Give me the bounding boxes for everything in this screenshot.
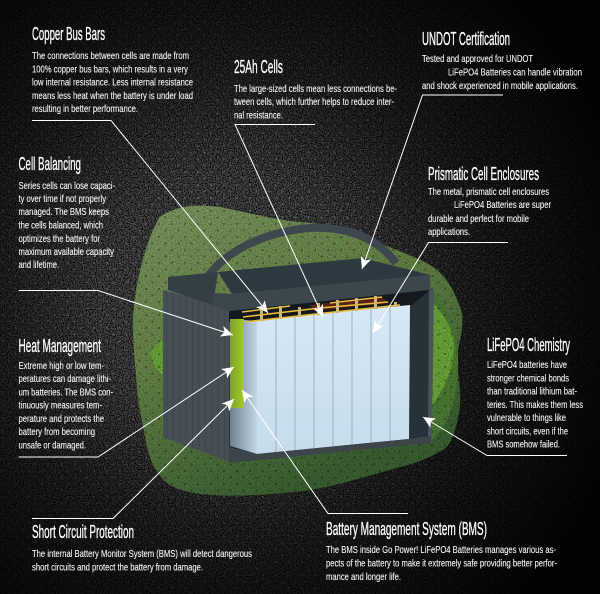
battery floor rim bbox=[229, 436, 431, 463]
callout: Short Circuit Protection: short circuits and protect the battery from damage. bbox=[32, 562, 203, 574]
callout: 25Ah Cells bbox=[234, 56, 397, 317]
callout: Cell Balancing: the cells balanced, which bbox=[18, 220, 103, 232]
lid top face bbox=[218, 258, 430, 294]
callout: Short Circuit Protection bbox=[32, 399, 252, 574]
callout: Copper Bus Bars: The connections between cells are made from bbox=[32, 51, 189, 62]
cell seams bbox=[276, 307, 390, 452]
callout: Prismatic Cell Enclosures: The metal, prismatic cell enclosures bbox=[428, 187, 549, 198]
callout: UNDOT Certification bbox=[362, 28, 582, 269]
callout: 25Ah Cells: nal resistance. bbox=[234, 110, 283, 122]
left side panel with ribs bbox=[163, 290, 230, 462]
callout: 25Ah Cells: 25Ah Cells bbox=[234, 56, 283, 77]
callout: Prismatic Cell Enclosures: LiFePO4 Batteries are super bbox=[454, 200, 551, 211]
bright green patch right bbox=[432, 302, 454, 405]
callout: LiFePO4 Chemistry bbox=[423, 334, 583, 456]
callout: 25Ah Cells: The large-sized cells mean less connections be- bbox=[234, 84, 397, 95]
callout: Copper Bus Bars: resulting in better performance. bbox=[32, 104, 138, 115]
callout: LiFePO4 Chemistry: vulnerable to things like bbox=[487, 413, 566, 424]
callout: Copper Bus Bars bbox=[32, 23, 268, 313]
green grain bbox=[130, 200, 466, 500]
green BMS board bbox=[230, 319, 244, 408]
callout: Short Circuit Protection: Short Circuit Protection bbox=[32, 521, 134, 542]
callout: UNDOT Certification: Tested and approved for UNDOT bbox=[422, 54, 533, 65]
lid rear left bbox=[168, 272, 218, 305]
callout: Short Circuit Protection: The internal Battery Monitor System (BMS) will detect dangerous bbox=[32, 549, 252, 560]
callout: Copper Bus Bars: low internal resistance. Less internal resistance bbox=[32, 78, 193, 88]
callout: UNDOT Certification: UNDOT Certification bbox=[422, 28, 510, 49]
callout: LiFePO4 Chemistry: BMS somehow failed. bbox=[487, 440, 560, 450]
callout: Heat Management: um batteries. The BMS con- bbox=[18, 388, 113, 398]
cell end face bbox=[230, 320, 257, 454]
bright green patch left bbox=[150, 340, 164, 376]
right wall bbox=[408, 289, 433, 439]
callout: Battery Management System: mance and longer life. bbox=[326, 572, 401, 583]
interior back wall bbox=[228, 289, 433, 460]
callout: Battery Management System bbox=[242, 390, 557, 583]
callout: Cell Balancing bbox=[18, 153, 233, 335]
callout: Heat Management: unsafe or damaged. bbox=[18, 440, 86, 452]
callout: Prismatic Cell Enclosures: durable and perfect for mobile bbox=[428, 214, 529, 225]
green mid-tone right bbox=[425, 285, 458, 445]
callout: LiFePO4 Chemistry: LiFePO4 batteries have bbox=[487, 360, 567, 371]
callout: Heat Management bbox=[18, 335, 234, 457]
callout: Cell Balancing: optimizes the battery for bbox=[18, 234, 100, 245]
battery illustration bbox=[163, 228, 434, 463]
callout: Cell Balancing: Series cells can lose capaci- bbox=[18, 181, 115, 192]
callout: Heat Management: perature and protects the bbox=[18, 414, 104, 425]
copper bus bars bbox=[242, 296, 400, 322]
callout: Cell Balancing: managed. The BMS keeps bbox=[18, 207, 109, 218]
cell fronts bbox=[257, 305, 410, 454]
callout: Copper Bus Bars: Copper Bus Bars bbox=[32, 23, 105, 44]
lid front face bbox=[213, 275, 430, 311]
callout: Cell Balancing: and lifetime. bbox=[18, 260, 59, 271]
green blob behind the battery bbox=[130, 200, 466, 500]
bus bar gap bbox=[229, 290, 430, 322]
callout: Copper Bus Bars: 100% copper bus bars, which results in a very bbox=[32, 64, 189, 76]
callout: Prismatic Cell Enclosures: applications. bbox=[428, 227, 470, 238]
callout: Heat Management: battery from becoming bbox=[18, 427, 95, 438]
callout: Cell Balancing: Cell Balancing bbox=[18, 153, 81, 174]
callout: LiFePO4 Chemistry: stronger chemical bonds bbox=[487, 374, 569, 384]
callout: LiFePO4 Chemistry: short circuits, even if the bbox=[487, 426, 568, 438]
callout: Heat Management: Heat Management bbox=[18, 335, 101, 356]
callout: Heat Management: peratures can damage lithi- bbox=[18, 374, 111, 385]
callout: Prismatic Cell Enclosures bbox=[373, 163, 551, 333]
callout: Heat Management: tinuously measures tem- bbox=[18, 400, 102, 412]
callout: 25Ah Cells: tween cells, which further helps to reduce inter- bbox=[234, 97, 394, 108]
callout: Heat Management: Extreme high or low tem- bbox=[18, 361, 104, 372]
callout: Cell Balancing: ty over time if not properly bbox=[18, 194, 107, 205]
callout: Copper Bus Bars: means less heat when the battery is under load bbox=[32, 91, 193, 102]
callout: Cell Balancing: maximum available capacity bbox=[18, 247, 115, 258]
handle bbox=[203, 228, 396, 285]
